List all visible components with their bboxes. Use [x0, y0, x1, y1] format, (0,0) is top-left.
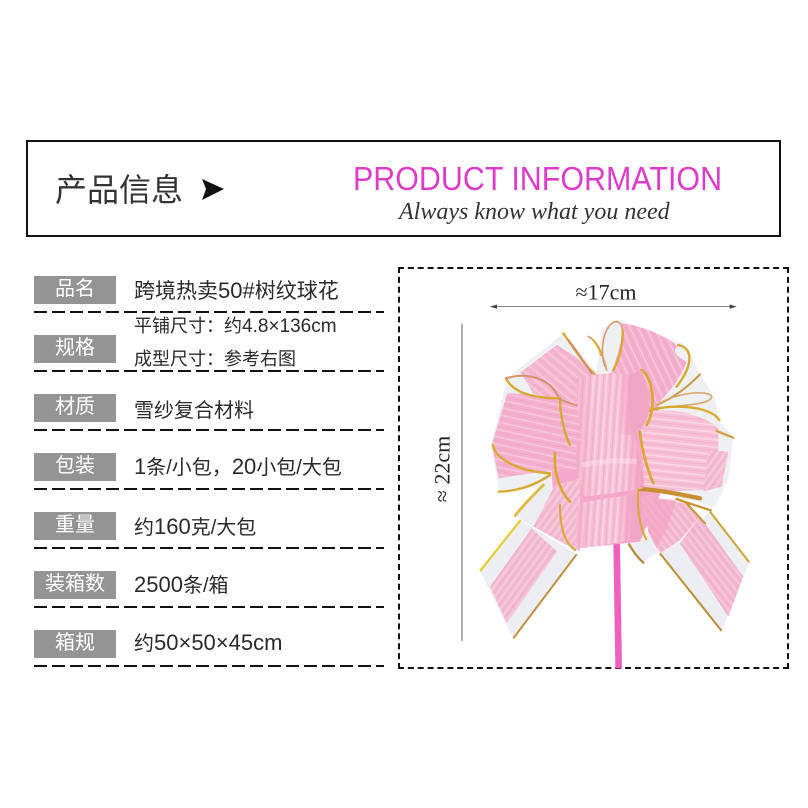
row: packing — [34, 453, 342, 481]
panel: product image — [398, 267, 789, 669]
row: weight: 重量 — [55, 514, 95, 536]
row: packing: 包装 — [55, 455, 95, 477]
upper left loop — [521, 345, 600, 412]
height label: ≈ 22cm — [429, 436, 454, 502]
row: packing: 1条/小包，20小包/大包 — [134, 454, 342, 479]
row: specification: 平铺尺寸：约4.8×136cm — [134, 316, 337, 337]
center knot: bottom cylinder — [576, 488, 647, 548]
top right loop — [610, 323, 687, 408]
row: specification: 成型尺寸：参考右图 — [134, 349, 296, 369]
center pink blob — [550, 372, 663, 548]
height arrow — [460, 323, 464, 641]
center knot: top cylinder — [577, 373, 634, 440]
left tail — [480, 520, 577, 638]
header box — [26, 140, 781, 237]
lower left stub — [515, 485, 577, 545]
heading: Chinese title: 产品信息 — [55, 172, 183, 208]
row: carton size: 箱规 — [55, 632, 95, 654]
row: quantity per carton — [34, 571, 229, 599]
icon: arrow — [202, 179, 224, 200]
row: carton size: 约50×50×45cm — [134, 630, 282, 655]
row: material: 材质 — [55, 396, 95, 418]
gold ribbon edges — [493, 322, 733, 563]
width label: ≈17cm — [576, 280, 636, 305]
stick — [613, 543, 622, 668]
right outer stripes — [703, 450, 728, 492]
center knot: middle cylinder — [576, 370, 649, 497]
row: product name — [34, 276, 339, 304]
row: specification: 规格 — [55, 337, 95, 359]
right tail — [660, 512, 749, 631]
row: specification — [34, 316, 337, 369]
right big loop — [638, 410, 718, 492]
small lower white flap — [628, 532, 659, 562]
row: weight — [34, 512, 256, 540]
width arrow — [491, 305, 736, 308]
product illustration: pull bow — [429, 280, 750, 668]
row: weight: 约160克/大包 — [134, 514, 256, 539]
lower right loop — [642, 497, 700, 553]
row: quantity per carton: 2500条/箱 — [134, 572, 229, 597]
row: product name: 品名 — [55, 278, 95, 300]
row: material — [34, 394, 254, 422]
row: carton size — [34, 630, 282, 658]
row: quantity per carton: 装箱数 — [45, 573, 105, 595]
subtitle: Always know what you need — [399, 199, 670, 225]
row: material: 雪纱复合材料 — [134, 400, 254, 422]
left big loop — [492, 393, 587, 478]
lower left loop — [533, 478, 580, 552]
heading: English title: PRODUCT INFORMATION — [353, 160, 722, 197]
row: product name: 跨境热卖50#树纹球花 — [134, 278, 339, 303]
white backing behind the fan — [492, 320, 733, 507]
